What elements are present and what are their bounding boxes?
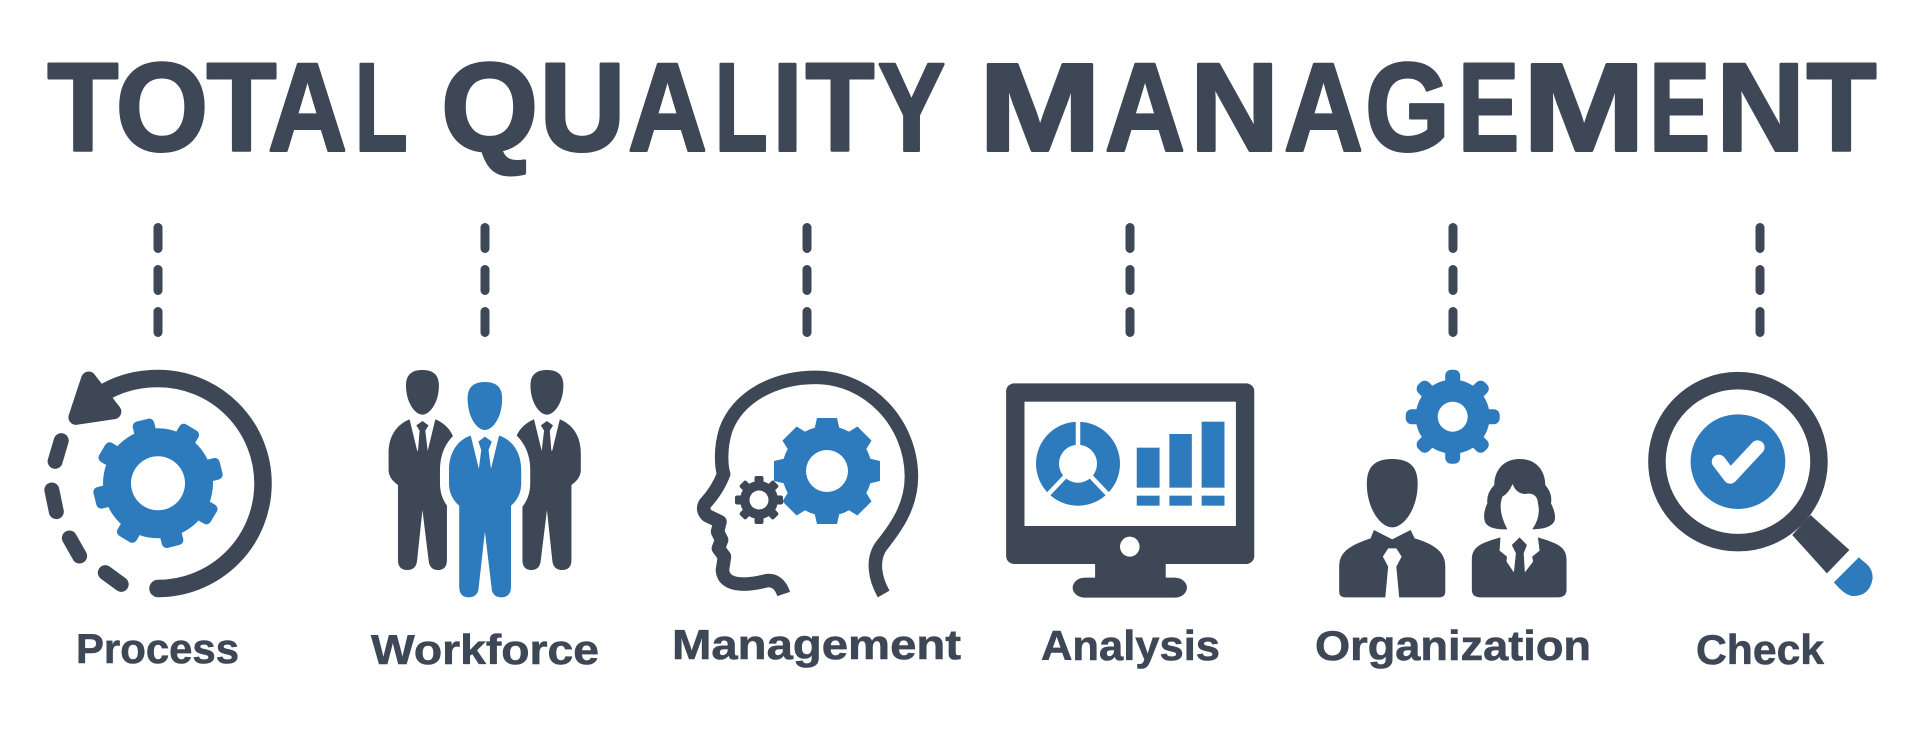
title: O [116,38,208,178]
icon: large blue gear [774,418,880,524]
chart: bars [1137,422,1224,506]
dashed connectors [158,228,1760,332]
icon: blue gear [1406,370,1500,464]
label: process: Process [76,625,239,672]
title: T [207,38,276,178]
icon: man and woman [1339,459,1567,597]
chart: donut [1036,420,1120,506]
title: L [355,38,408,178]
panel: process [52,378,263,672]
icon: circular arrow [52,378,263,588]
title: Y [878,38,945,178]
title: A [1105,38,1185,178]
panel: check [1657,381,1873,673]
title: A [268,38,347,178]
label: analysis: Analysis [1041,622,1220,669]
label: organization: Organization [1315,622,1591,669]
title: L [715,38,768,178]
title [48,38,1876,178]
title: M [979,38,1101,178]
panel: analysis [1006,383,1254,669]
icon: small dark gear [735,476,783,524]
label: management: Management [672,621,961,668]
title: M [1523,38,1645,178]
title: Q [441,38,538,178]
icon: blue gear [92,418,224,549]
panel: organization [1315,370,1591,669]
icon: head outline [704,377,911,594]
icon: three people [389,370,581,597]
title: N [1190,38,1279,178]
icon: monitor [1006,383,1254,598]
title: T [1807,38,1876,178]
title: E [1458,38,1519,178]
title: I [773,38,802,178]
title: E [1649,38,1710,178]
panel: workforce [371,370,599,673]
title: U [540,38,625,178]
title: T [48,38,118,178]
title: A [628,38,707,178]
icon: magnifying glass [1657,381,1873,596]
label: workforce: Workforce [371,626,599,673]
label: check: Check [1696,626,1825,673]
panel: management [672,377,961,668]
title: N [1716,38,1805,178]
title: A [1284,38,1363,178]
title: G [1365,38,1450,178]
title: T [806,38,874,178]
